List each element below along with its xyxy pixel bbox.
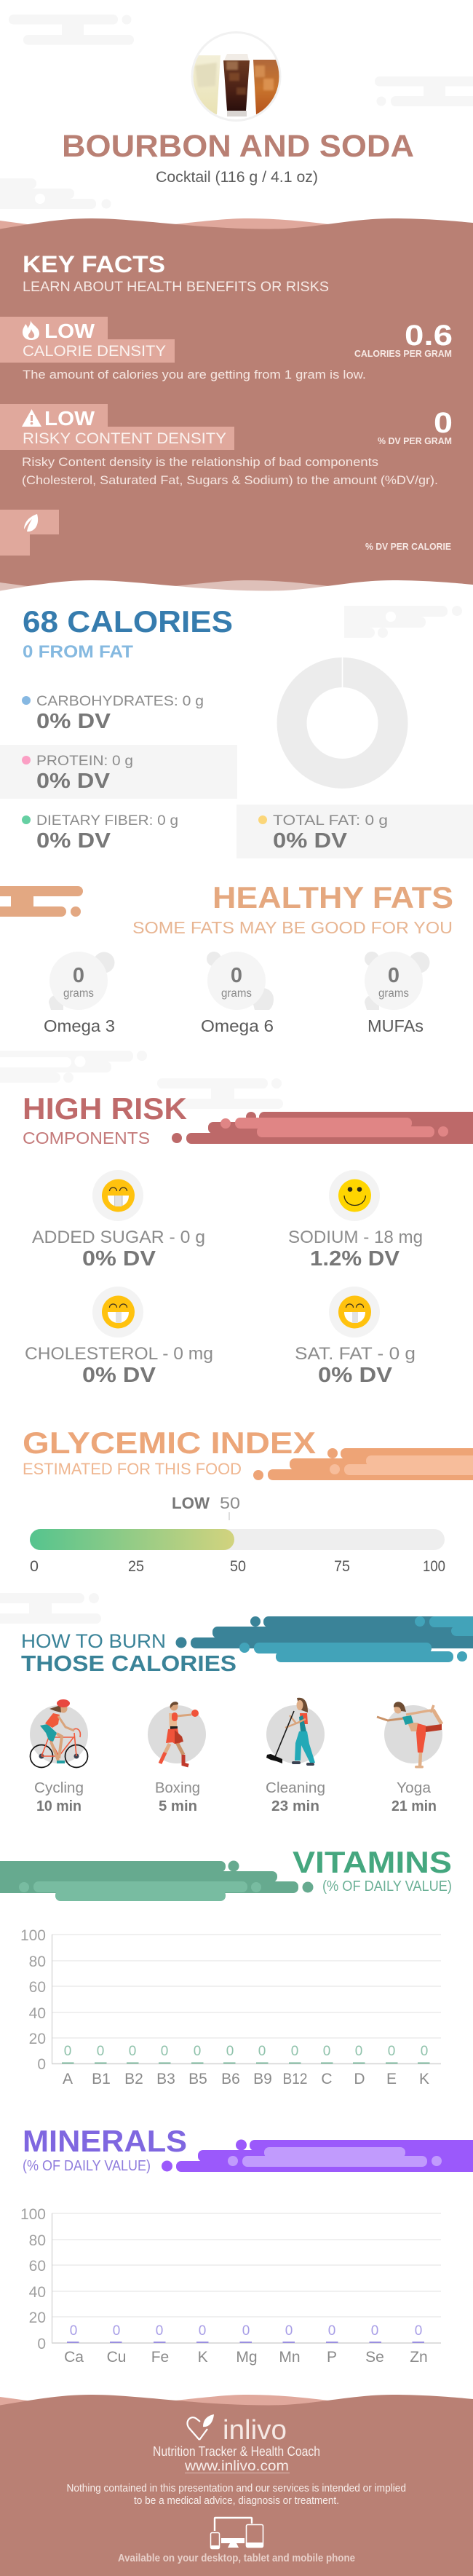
heading: how to burn: HOW TO BURN <box>21 1630 166 1652</box>
bar chart: minerals: 0 <box>113 2323 120 2339</box>
activity: cleaning: 23 min <box>271 1798 319 1814</box>
bar chart: vitamins: 0 <box>258 2044 266 2059</box>
icon: leaf <box>24 514 38 532</box>
bar chart: vitamins: B2 <box>124 2071 143 2087</box>
link: website: www.inlivo.com <box>184 2459 289 2474</box>
bar chart: vitamins: B6 <box>221 2071 240 2087</box>
text: risky content note: (Cholesterol, Saturated Fat, Sugars & Sodium) to the amount (%DV/gr). <box>22 473 438 487</box>
background cloud: burn <box>0 1593 101 1624</box>
icon: warning triangle <box>22 409 41 427</box>
badge: risky content density <box>0 404 234 450</box>
icon: grin face <box>338 1296 371 1328</box>
rating: low: LOW <box>44 320 95 342</box>
stat: omega 3: 0 <box>73 964 84 987</box>
heading: high risk: HIGH RISK <box>23 1091 187 1126</box>
bar chart: vitamins: B12 <box>282 2071 307 2087</box>
item: added sugar <box>32 1170 205 1271</box>
row: dietary fiber: DIETARY FIBER: 0 g <box>36 813 178 829</box>
stat: omega 6 <box>201 952 274 1035</box>
icon: devices <box>211 2518 263 2549</box>
stat: omega 6: Omega 6 <box>201 1016 274 1035</box>
subheading: components: COMPONENTS <box>23 1129 150 1147</box>
banner: burn calories <box>176 1616 473 1662</box>
bar chart: vitamins: 0 <box>194 2044 201 2059</box>
activity: cycling <box>30 1699 88 1814</box>
item: sodium <box>288 1170 423 1271</box>
bar chart: vitamins: B9 <box>253 2071 272 2087</box>
bar chart: minerals: Fe <box>151 2349 169 2366</box>
bar chart: vitamins: 0 <box>323 2044 330 2059</box>
gauge: glycemic index: 50 <box>230 1558 246 1575</box>
icon: boxer <box>160 1702 199 1766</box>
activity: yoga <box>377 1702 442 1814</box>
bar chart: vitamins: D <box>354 2071 365 2087</box>
bar chart: minerals: Mn <box>279 2349 301 2366</box>
bar chart: vitamins: B3 <box>156 2071 175 2087</box>
bar chart: minerals: 0 <box>328 2323 335 2339</box>
badge: calorie density <box>0 317 175 363</box>
gauge: glycemic index: 75 <box>334 1558 350 1575</box>
stat: percent dv per gram: % DV PER GRAM <box>378 436 452 446</box>
panel: calories <box>0 604 473 858</box>
bar chart: minerals: 60 <box>29 2258 46 2275</box>
banner: healthy fats <box>0 886 83 917</box>
heading: healthy fats: HEALTHY FATS <box>212 880 453 914</box>
donut chart <box>292 657 393 773</box>
stat: mufas <box>365 952 429 1035</box>
title: BOURBON AND SODA <box>62 129 414 164</box>
bar chart: vitamins: B5 <box>188 2071 207 2087</box>
stat: calories per gram: CALORIES PER GRAM <box>354 349 452 359</box>
bar chart: vitamins: E <box>386 2071 397 2087</box>
banner: glycemic index <box>253 1448 473 1480</box>
row: carbohydrates <box>22 693 204 733</box>
item: saturated fat: 0% DV <box>318 1364 393 1387</box>
row: total fat <box>236 805 473 858</box>
stat: mufas: grams <box>378 987 409 1000</box>
logo: inlivo: inlivo <box>223 2415 287 2446</box>
item: saturated fat: SAT. FAT - 0 g <box>295 1344 416 1364</box>
item: sodium: 1.2% DV <box>310 1247 400 1271</box>
item: added sugar: 0% DV <box>82 1247 156 1271</box>
icon: woman in yoga pose <box>377 1702 442 1768</box>
food photo: three glasses <box>191 32 284 121</box>
bar chart: vitamins: 0 <box>64 2044 71 2059</box>
item: cholesterol: CHOLESTEROL - 0 mg <box>25 1344 213 1364</box>
bar chart: minerals: 0 <box>156 2323 163 2339</box>
heading: those calories: THOSE CALORIES <box>21 1651 236 1676</box>
bar chart: minerals: 0 <box>199 2323 206 2339</box>
activity: yoga: 21 min <box>391 1798 437 1814</box>
bar chart: minerals: Ca <box>64 2349 84 2366</box>
bar chart: minerals: 0 <box>70 2323 77 2339</box>
bar chart: vitamins: A <box>63 2071 73 2087</box>
row: total fat: 0% DV <box>273 829 348 853</box>
bar chart: vitamins: 0 <box>226 2044 234 2059</box>
bar chart: vitamins: 0 <box>161 2044 168 2059</box>
stat: omega 3: grams <box>63 987 94 1000</box>
text: disclaimer: Nothing contained in this presentation and our services is intended or implied <box>67 2482 406 2494</box>
label: calorie density: CALORIE DENSITY <box>23 342 166 360</box>
banner: minerals <box>162 2139 473 2172</box>
icon: grin face <box>102 1296 135 1328</box>
bar chart: vitamins: 100 <box>20 1927 46 1944</box>
badge: leaf <box>0 510 59 556</box>
panel: key facts <box>0 218 473 597</box>
row: protein: PROTEIN: 0 g <box>36 753 133 769</box>
stat: calories per gram: 0.6 <box>405 320 453 352</box>
bar chart: minerals: 0 <box>371 2323 378 2339</box>
bar chart: minerals: K <box>198 2349 208 2366</box>
stat: mufas: MUFAs <box>367 1016 424 1035</box>
banner: vitamins <box>0 1861 313 1901</box>
text: availability: Available on your desktop, tablet and mobile phone <box>118 2552 355 2564</box>
row: total fat: TOTAL FAT: 0 g <box>273 813 388 829</box>
logo: inlivo <box>187 2414 287 2446</box>
item: added sugar: ADDED SUGAR - 0 g <box>32 1228 205 1247</box>
bar chart: vitamins: 80 <box>29 1953 46 1970</box>
bar chart: minerals: Zn <box>410 2349 428 2366</box>
activity: yoga: Yoga <box>397 1780 432 1796</box>
bar chart: vitamins: 60 <box>29 1979 46 1996</box>
bar chart: vitamins: 20 <box>29 2031 46 2047</box>
subheading: minerals: (% OF DAILY VALUE) <box>23 2158 151 2174</box>
text: risky content note: Risky Content density is the relationship of bad components <box>22 455 378 469</box>
item: sodium: SODIUM - 18 mg <box>288 1228 423 1247</box>
bar chart: minerals: 40 <box>29 2284 46 2301</box>
background clouds: header <box>0 15 473 209</box>
bar chart: vitamins: 0 <box>129 2044 136 2059</box>
item: saturated fat <box>295 1287 416 1387</box>
bar chart: vitamins: 0 <box>37 2056 46 2073</box>
bar chart: vitamins: B1 <box>92 2071 111 2087</box>
icon: cyclist <box>31 1699 87 1768</box>
row: dietary fiber: 0% DV <box>36 829 111 853</box>
bar chart: minerals: 20 <box>29 2310 46 2326</box>
heading: minerals: MINERALS <box>23 2124 187 2158</box>
subheading: LEARN ABOUT HEALTH BENEFITS OR RISKS <box>23 279 329 295</box>
label: percent dv per calorie: % DV PER CALORIE <box>365 542 451 552</box>
icon: flame <box>23 320 39 340</box>
text: disclaimer <box>67 2482 406 2507</box>
stat: omega 3 <box>44 952 115 1035</box>
heading: vitamins: VITAMINS <box>293 1845 452 1879</box>
gauge: glycemic index: 25 <box>128 1558 144 1575</box>
gauge: glycemic index: 100 <box>423 1558 445 1575</box>
icon: smile face <box>338 1180 371 1212</box>
stat: omega 6: 0 <box>231 964 242 987</box>
subtitle: serving: Cocktail (116 g / 4.1 oz) <box>156 169 318 186</box>
bar chart: vitamins: C <box>321 2071 333 2087</box>
activity: cycling: Cycling <box>34 1780 84 1796</box>
stat: calories per gram <box>354 320 453 359</box>
stat: omega 6: grams <box>221 987 252 1000</box>
row: carbohydrates: CARBOHYDRATES: 0 g <box>36 693 204 709</box>
gauge: glycemic index: 0 <box>30 1558 39 1575</box>
tagline: Nutrition Tracker & Health Coach <box>153 2443 320 2459</box>
stat: omega 3: Omega 3 <box>44 1016 115 1035</box>
subheading: vitamins: (% OF DAILY VALUE) <box>322 1878 452 1895</box>
bar chart: minerals: 0 <box>285 2323 293 2339</box>
activity: boxing: Boxing <box>155 1780 200 1796</box>
bar chart: minerals: Se <box>365 2349 384 2366</box>
item: cholesterol: 0% DV <box>82 1364 156 1387</box>
bar chart: minerals: 80 <box>29 2232 46 2249</box>
bar chart: minerals: Cu <box>107 2349 126 2366</box>
heading: glycemic index: GLYCEMIC INDEX <box>23 1426 316 1460</box>
bar chart: minerals: 0 <box>242 2323 250 2339</box>
activity: cleaning <box>266 1698 325 1814</box>
stat: mufas: 0 <box>388 964 400 987</box>
subheading: estimated: ESTIMATED FOR THIS FOOD <box>23 1460 242 1478</box>
bar chart: vitamins: 0 <box>355 2044 362 2059</box>
heading: 68 calories: 68 CALORIES <box>23 604 233 639</box>
bar chart: vitamins <box>20 1927 441 2087</box>
banner: high risk <box>172 1112 473 1144</box>
activity: cleaning: Cleaning <box>266 1780 325 1796</box>
heading: key facts: KEY FACTS <box>23 251 165 277</box>
panel: footer <box>0 2395 473 2576</box>
bar chart: minerals <box>20 2206 441 2366</box>
bar chart: vitamins: 0 <box>388 2044 395 2059</box>
bar chart: vitamins: 0 <box>97 2044 104 2059</box>
label: risky content density: RISKY CONTENT DENSITY <box>23 430 226 447</box>
text: risky content note <box>22 455 438 487</box>
background clouds: high risk <box>0 1051 283 1109</box>
icon: grin face <box>102 1180 135 1212</box>
rating: low: LOW <box>44 407 95 430</box>
gauge: glycemic index <box>30 1494 445 1575</box>
row: protein: 0% DV <box>36 770 111 793</box>
row: dietary fiber <box>22 813 178 853</box>
bar chart: minerals: Mg <box>236 2349 258 2366</box>
bar chart: vitamins: 0 <box>421 2044 428 2059</box>
stat: percent dv per gram <box>378 407 453 446</box>
bar chart: vitamins: 0 <box>291 2044 298 2059</box>
item: cholesterol <box>25 1287 213 1387</box>
activity: cycling: 10 min <box>36 1798 82 1814</box>
gauge: glycemic index: LOW <box>172 1494 210 1512</box>
row: protein <box>0 745 237 799</box>
stat: percent dv per gram: 0 <box>434 407 453 439</box>
row: carbohydrates: 0% DV <box>36 710 111 733</box>
text: calorie density note: The amount of calories you are getting from 1 gram is low. <box>23 368 366 382</box>
subheading: healthy fats: SOME FATS MAY BE GOOD FOR YOU <box>132 918 453 937</box>
bar chart: minerals: 100 <box>20 2206 46 2223</box>
background cloud: calories <box>344 606 462 638</box>
icon: woman sweeping <box>266 1698 315 1766</box>
bar chart: minerals: 0 <box>37 2336 46 2352</box>
subheading: from fat: 0 FROM FAT <box>23 642 133 662</box>
bar chart: minerals: 0 <box>415 2323 422 2339</box>
bar chart: vitamins: K <box>419 2071 429 2087</box>
text: disclaimer: to be a medical advice, diagnosis or treatment. <box>134 2494 339 2507</box>
bar chart: minerals: P <box>327 2349 337 2366</box>
activity: boxing: 5 min <box>159 1798 197 1814</box>
activity: boxing <box>148 1702 206 1814</box>
bar chart: vitamins: 40 <box>29 2005 46 2022</box>
gauge: glycemic index: 50 <box>220 1494 240 1512</box>
